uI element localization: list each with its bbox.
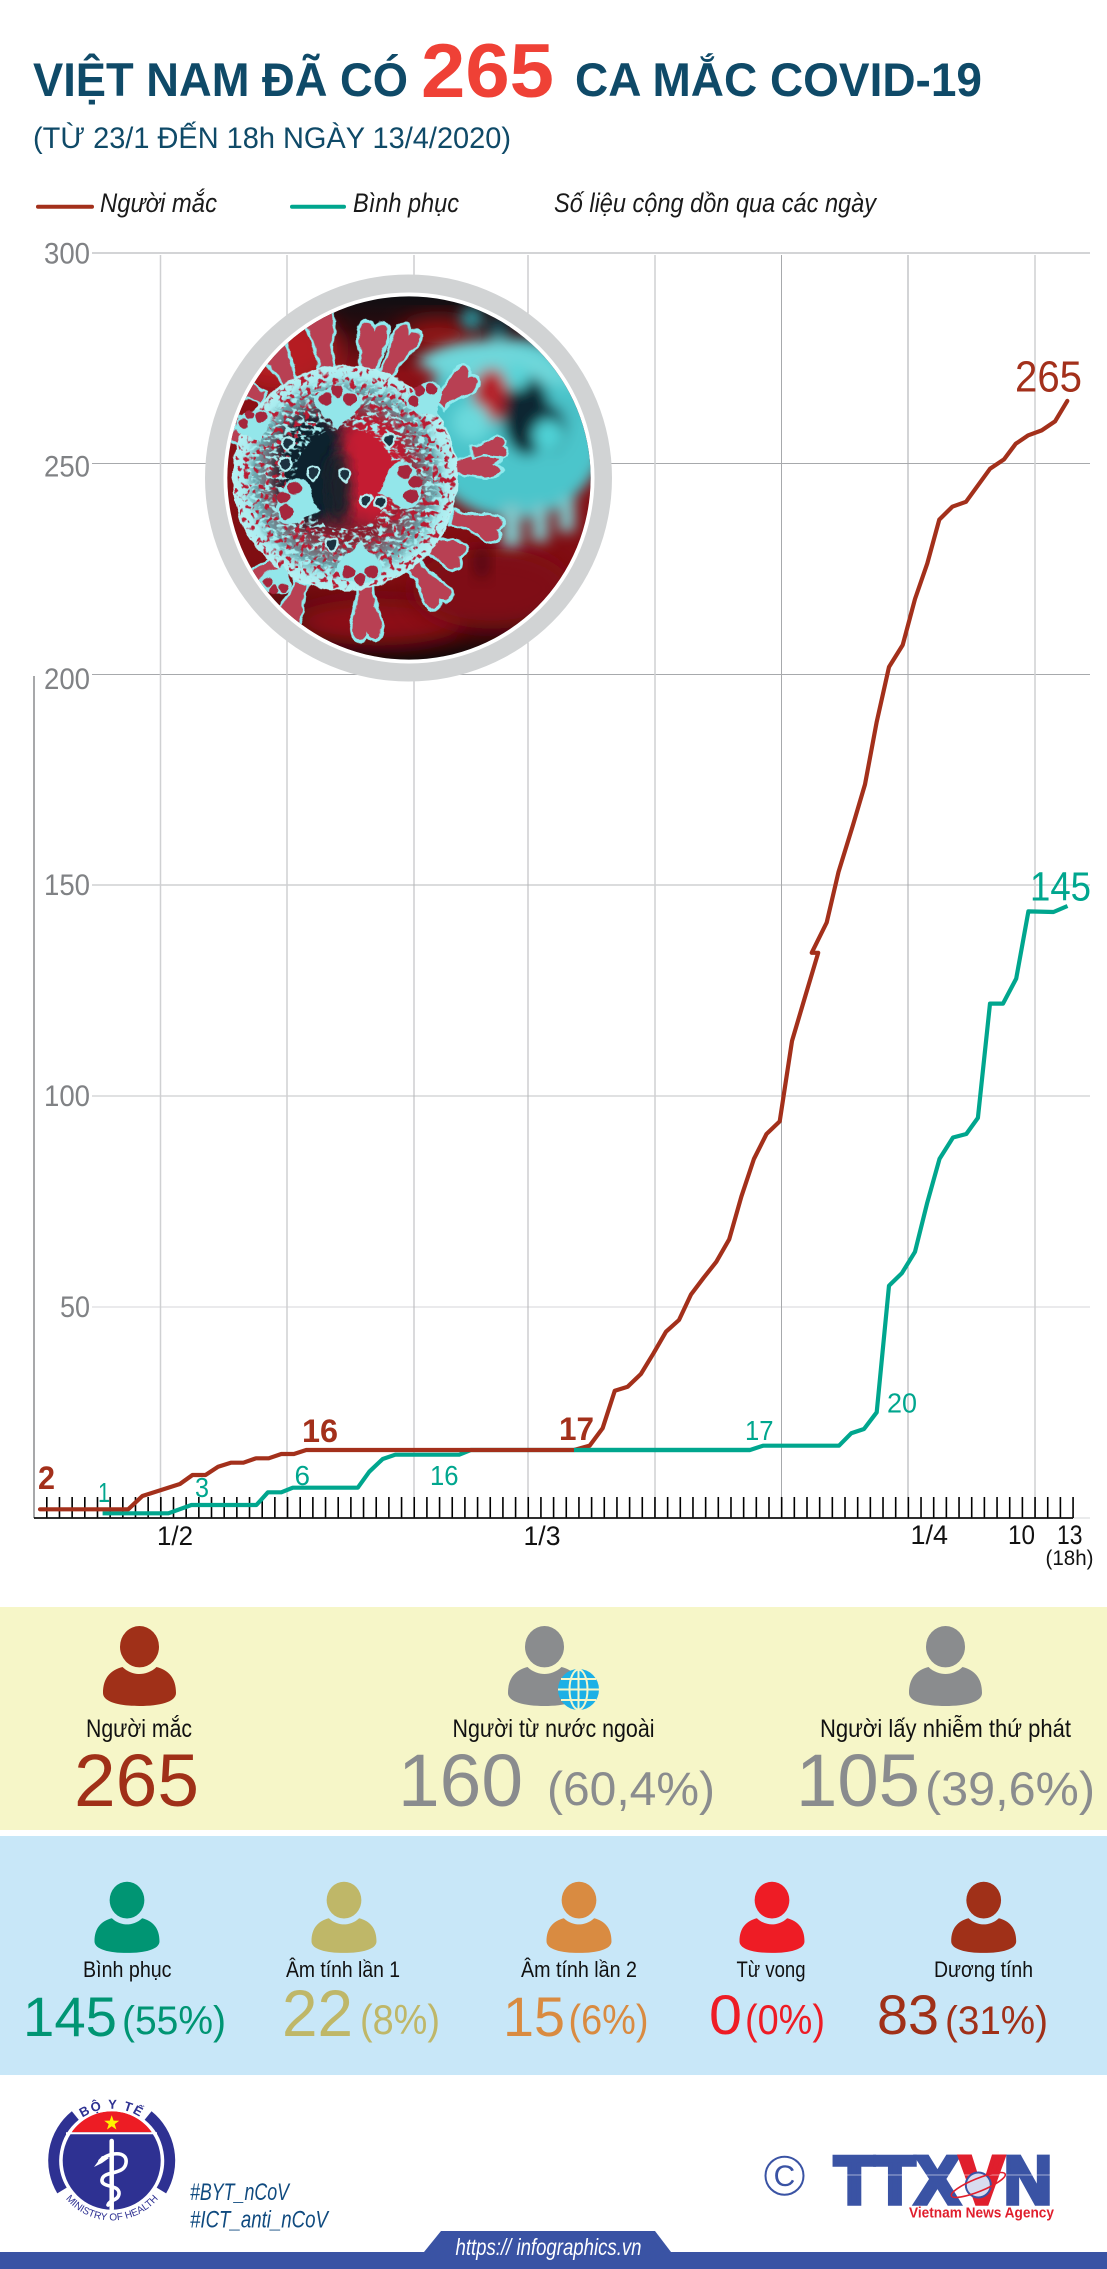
y axis labels: 150 [44, 869, 90, 902]
stat: dương tính: 83 [877, 1983, 939, 2046]
icon: copyright: C [774, 2160, 795, 2193]
stat: âm tính lần 1: (8%) [360, 1996, 440, 2043]
hashtags: #ICT_anti_nCoV [190, 2206, 330, 2234]
recovered value labels: 3 [195, 1472, 209, 1503]
legend: Bình phục [353, 188, 459, 218]
head-on spikes [236, 381, 442, 595]
stat: dương tính [877, 1882, 1048, 2046]
recovered line [103, 906, 1068, 1513]
icon: person foreign with globe [508, 1626, 599, 1710]
stat: người từ nước ngoài: Người từ nước ngoài [452, 1715, 654, 1743]
y axis labels: 50 [60, 1291, 90, 1324]
main virus with spikes [226, 301, 509, 641]
stat: người lây nhiễm thứ phát: (39,6%) [925, 1762, 1095, 1815]
recovered value labels: 145 [1030, 864, 1091, 910]
y axis labels [44, 238, 90, 1324]
hashtags [190, 2179, 330, 2234]
spikes [226, 301, 509, 641]
title: 265 [421, 29, 554, 114]
title: CA MẮC COVID-19 [575, 53, 982, 106]
stat: bình phục: 145 [23, 1985, 117, 2048]
stat: bình phục: Bình phục [83, 1957, 172, 1982]
recovered line overlap segment [574, 1448, 750, 1452]
y axis labels: 250 [44, 450, 90, 484]
icon: person secondary [909, 1626, 982, 1706]
stat: người từ nước ngoài [398, 1715, 715, 1822]
logo: Ministry of Health: MINISTRY OF HEALTH [66, 2194, 158, 2220]
recovered value labels [98, 864, 1091, 1508]
stat: âm tính lần 1 [282, 1882, 440, 2050]
confirmed value labels: 265 [1015, 352, 1082, 402]
logo: Ministry of Health: BỘ Y TẾ [78, 2100, 144, 2118]
x axis labels: (18h) [1046, 1547, 1094, 1570]
stat: người lây nhiễm thứ phát: 105 [796, 1739, 920, 1822]
stat: bình phục [23, 1882, 226, 2048]
x axis labels: 10 [1008, 1520, 1035, 1550]
footer url: https:// infographics.vn [456, 2234, 642, 2260]
stat: dương tính: (31%) [945, 1999, 1048, 2043]
icon: person confirmed [103, 1626, 176, 1706]
stat: người lây nhiễm thứ phát: Người lấy nhiễm thứ phát [820, 1714, 1071, 1743]
y axis labels: 100 [44, 1080, 90, 1113]
stat: âm tính lần 1: Âm tính lần 1 [286, 1957, 400, 1982]
chart: cumulative cases [34, 238, 1094, 1570]
x axis labels: 1/2 [157, 1521, 193, 1551]
x axis labels: 1/4 [910, 1520, 948, 1550]
recovered value labels: 16 [430, 1460, 458, 1491]
stat: tử vong: Từ vong [736, 1957, 806, 1982]
legend [38, 187, 877, 218]
stat: tử vong: 0 [709, 1983, 742, 2046]
stat: người mắc: 265 [74, 1739, 199, 1822]
y axis labels: 300 [44, 238, 90, 270]
x axis labels [157, 1520, 1094, 1570]
stat: dương tính: Dương tính [934, 1957, 1033, 1982]
legend: Người mắc [100, 187, 217, 218]
confirmed value labels [38, 352, 1082, 1496]
title [33, 29, 982, 114]
stat: âm tính lần 2: (6%) [568, 1996, 648, 2043]
stat: tử vong [709, 1882, 825, 2046]
stat: người lây nhiễm thứ phát [796, 1714, 1095, 1822]
stat: người mắc: Người mắc [86, 1714, 192, 1743]
blurred virus [415, 307, 607, 547]
hashtags: #BYT_nCoV [190, 2179, 290, 2206]
recovered value labels: 17 [745, 1415, 774, 1446]
virus photo in ring [205, 274, 612, 682]
confirmed value labels: 2 [38, 1460, 55, 1496]
stat: bình phục: (55%) [122, 1999, 226, 2043]
body [232, 365, 458, 591]
stat: người từ nước ngoài: (60,4%) [547, 1762, 715, 1815]
legend: Số liệu cộng dồn qua các ngày [554, 188, 877, 218]
panel: cases summary [0, 1607, 1107, 1830]
panel: outcomes [0, 1836, 1107, 2075]
subtitle: (TỪ 23/1 ĐẾN 18h NGÀY 13/4/2020) [33, 121, 511, 155]
stat: người từ nước ngoài: 160 [398, 1739, 523, 1822]
x axis labels: 13 [1057, 1520, 1082, 1550]
x axis labels: 1/3 [524, 1521, 560, 1551]
stat: tử vong: (0%) [745, 1996, 825, 2043]
recovered value labels: 1 [98, 1477, 110, 1508]
confirmed value labels: 17 [559, 1411, 594, 1447]
logo: TTXVN: Vietnam News Agency [909, 2206, 1054, 2222]
recovered value labels: 20 [887, 1388, 917, 1418]
confirmed value labels: 16 [302, 1413, 338, 1449]
x axis day ticks [34, 1508, 1074, 1518]
logo: Ministry of Health [48, 2100, 176, 2220]
icon: copyright [766, 2157, 804, 2195]
stat: âm tính lần 2: 15 [503, 1985, 565, 2048]
logo: TTXVN: TTXVN [834, 2142, 1052, 2218]
title: VIỆT NAM ĐÃ CÓ [33, 53, 408, 106]
stat: âm tính lần 2: Âm tính lần 2 [521, 1957, 637, 1982]
stat: âm tính lần 2 [503, 1882, 648, 2048]
y axis labels: 200 [44, 663, 90, 696]
recovered value labels: 6 [294, 1460, 310, 1491]
stat: âm tính lần 1: 22 [282, 1976, 353, 2050]
confirmed cases line [40, 401, 1067, 1509]
footer band [0, 2231, 1107, 2269]
